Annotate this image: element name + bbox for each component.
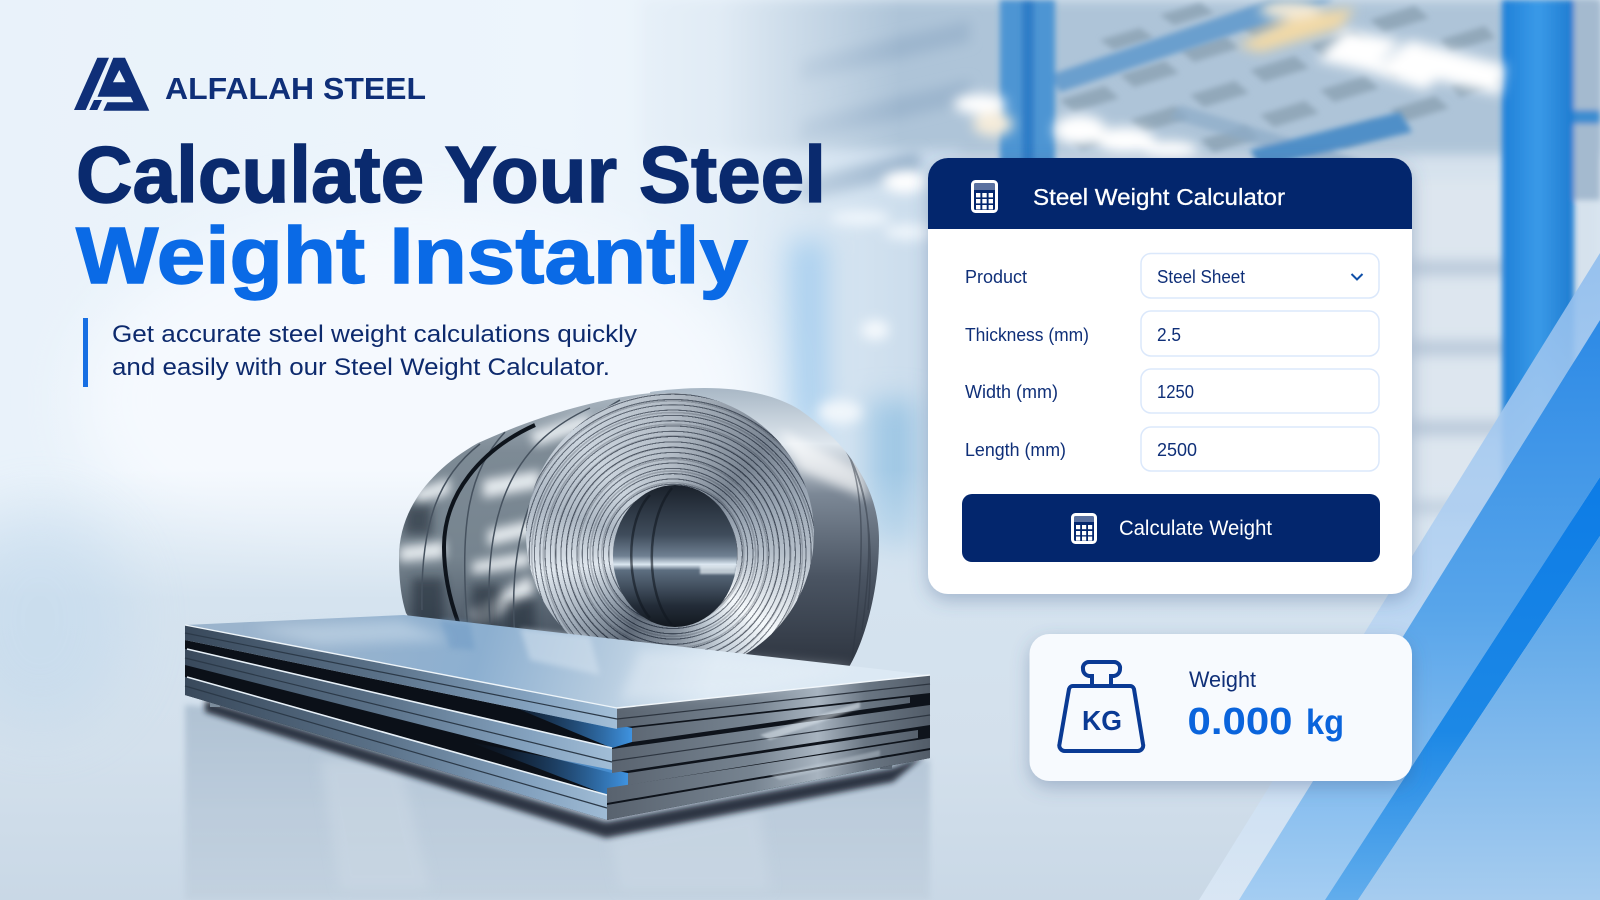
brand name: ALFALAH STEEL <box>165 71 426 106</box>
field: thickness: 2.5 <box>1157 325 1181 345</box>
weight value: 0.000 <box>1188 701 1292 743</box>
field: width <box>965 369 1379 413</box>
panel: weight result card <box>1030 634 1412 781</box>
weight value: kg <box>1306 703 1344 742</box>
field: length: Length (mm) <box>965 440 1066 460</box>
subtitle text: Get accurate steel weight calculations quickly <box>112 321 637 348</box>
logo: AS monogram <box>74 58 149 111</box>
card header <box>928 158 1412 229</box>
field: product <box>965 254 1379 298</box>
subtitle text: and easily with our Steel Weight Calculator. <box>112 354 610 381</box>
accent bar <box>83 318 88 387</box>
field: thickness: Thickness (mm) <box>965 325 1089 345</box>
stack of steel plates <box>185 615 930 838</box>
steel coil <box>399 388 879 690</box>
icon: button calculator <box>1072 514 1096 542</box>
card title: Steel Weight Calculator <box>1033 184 1285 210</box>
title line 2: Weight Instantly <box>76 211 749 300</box>
plate fronts, short side <box>607 750 930 820</box>
field: product: Product <box>965 267 1027 287</box>
icon: header calculator <box>972 182 996 212</box>
field: width: 1250 <box>1157 382 1194 402</box>
subtitle text <box>112 321 637 381</box>
plate fronts, long side <box>185 677 607 820</box>
title line 1: Calculate Your Steel <box>76 130 826 219</box>
field: product: Steel Sheet <box>1157 267 1245 287</box>
weight label: Weight <box>1189 667 1256 692</box>
dark gaps between plates <box>185 640 617 820</box>
field: thickness <box>965 311 1379 356</box>
weight value <box>1188 701 1344 743</box>
field: width: Width (mm) <box>965 382 1058 402</box>
panel: calculator card <box>928 158 1412 594</box>
icon: KG weight <box>1059 662 1143 751</box>
field: length <box>965 427 1379 471</box>
calculate button: Calculate Weight <box>1119 517 1272 540</box>
diagonal blue accent bands <box>1199 253 1600 900</box>
icon: KG weight: KG <box>1082 705 1122 736</box>
top plate surface <box>185 615 930 708</box>
field: length: 2500 <box>1157 440 1197 460</box>
calculate button <box>962 494 1380 562</box>
